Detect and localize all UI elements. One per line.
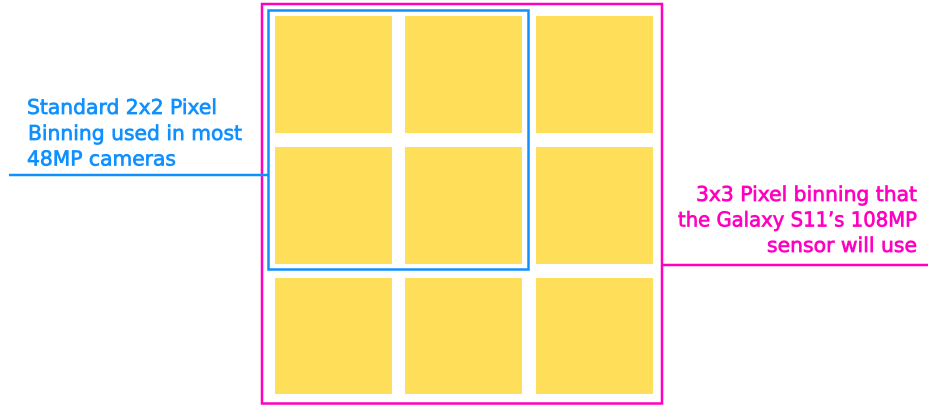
label: 3x3 binning: 3x3 Pixel binning that xyxy=(696,182,917,206)
blue leader line xyxy=(9,174,268,176)
magenta leader line xyxy=(662,264,928,266)
label: standard 2x2 binning: Standard 2x2 Pixel xyxy=(27,95,217,119)
3x3 binning outline xyxy=(262,4,662,404)
label: standard 2x2 binning: 48MP cameras xyxy=(27,146,176,170)
label: 3x3 binning: the Galaxy S11’s 108MP xyxy=(678,208,917,232)
label: 3x3 binning: sensor will use xyxy=(767,233,917,257)
label: standard 2x2 binning: Binning used in most xyxy=(28,121,242,145)
label: 3x3 binning xyxy=(678,182,917,257)
label: standard 2x2 binning xyxy=(27,95,242,170)
pixel grid xyxy=(275,16,653,394)
2x2 binning outline xyxy=(268,10,528,270)
